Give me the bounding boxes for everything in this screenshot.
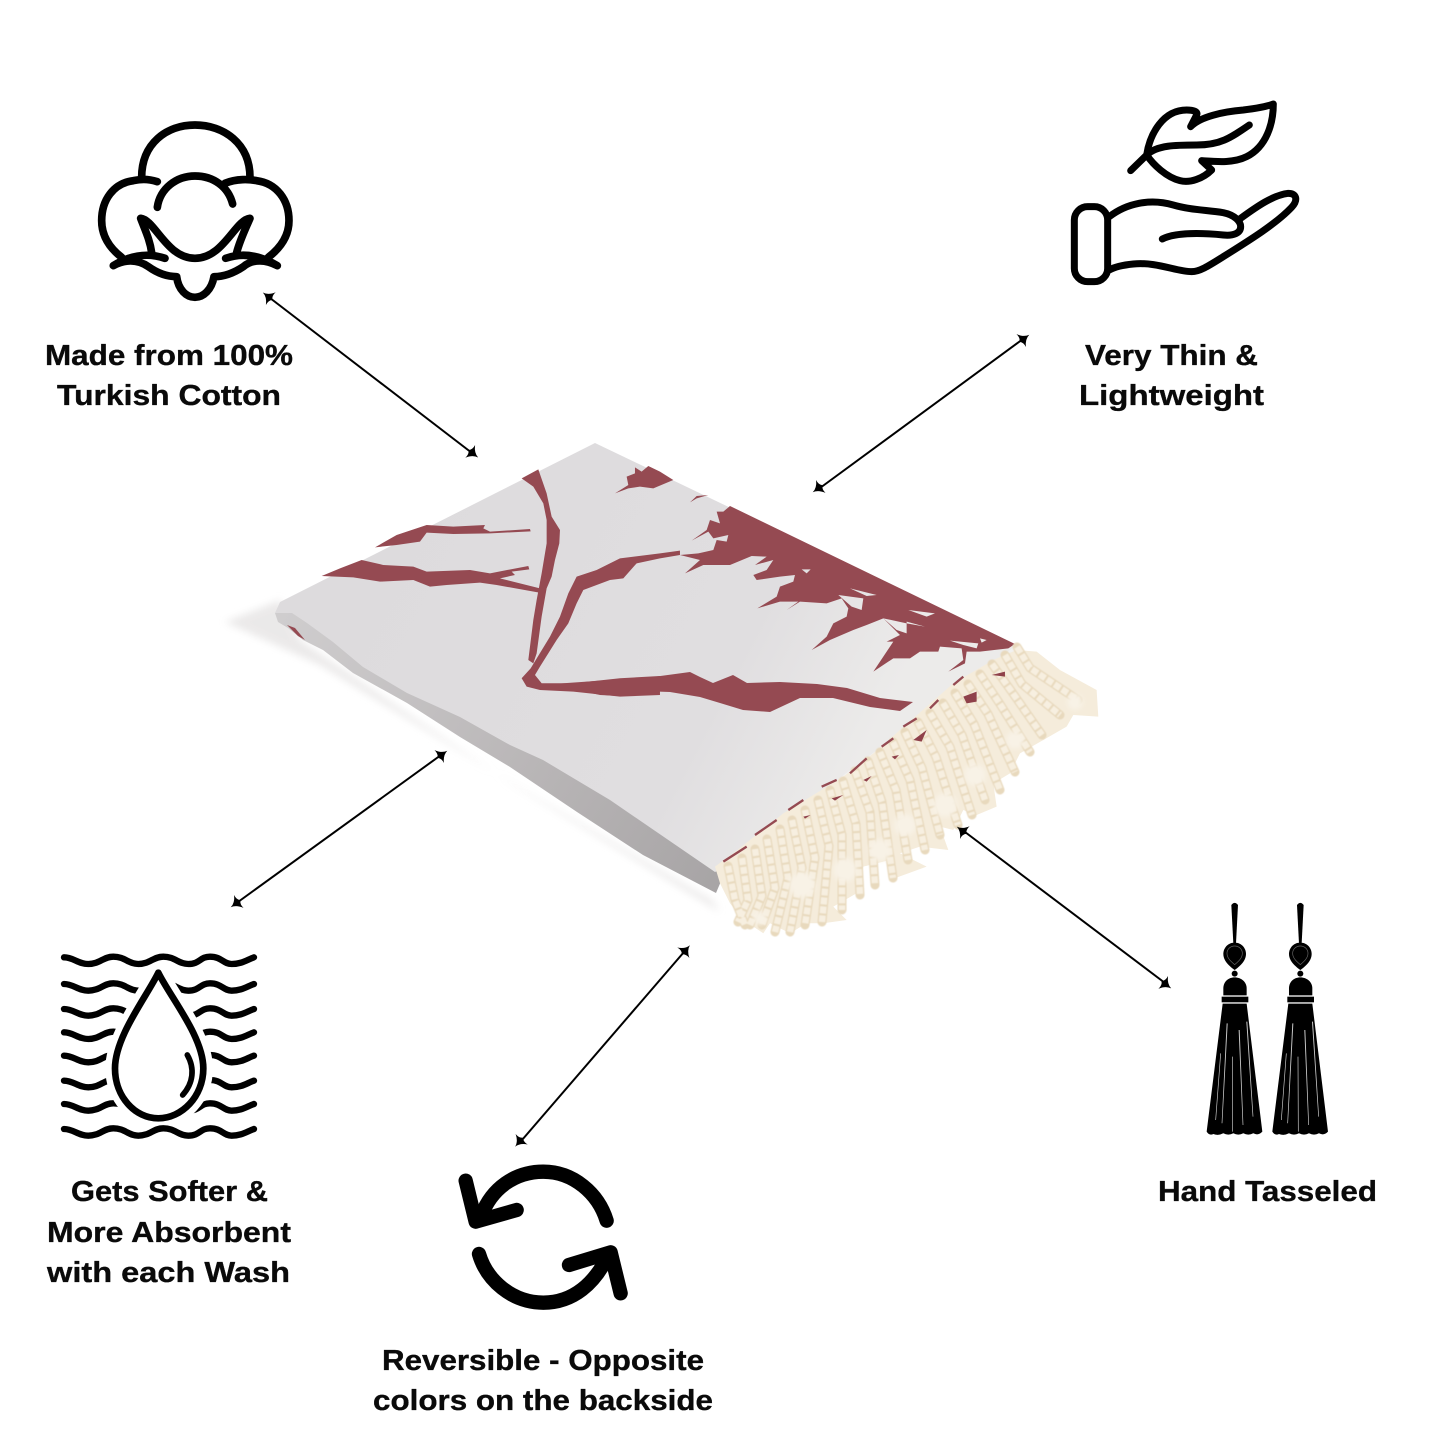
icon: water drop in waves: [64, 957, 254, 1136]
arrow: tassels: [952, 820, 1176, 995]
fringe mass: [715, 650, 1098, 933]
arrow: reversible: [509, 940, 696, 1152]
label: absorbent: More Absorbent: [47, 1217, 291, 1249]
fringe strand shadows: [728, 647, 1078, 932]
arrow: lightweight: [808, 328, 1034, 499]
label: absorbent: Gets Softer &: [71, 1176, 268, 1208]
label: lightweight: Lightweight: [1079, 380, 1264, 412]
icon: two tassels: [1207, 903, 1328, 1135]
label: cotton: Turkish Cotton: [57, 380, 281, 412]
towel photo: [225, 443, 1098, 933]
maroon tree pattern right: [680, 495, 1015, 672]
frayed tassel ends: [753, 694, 1083, 925]
arrow: absorbent: [226, 744, 452, 914]
label: cotton: [45, 340, 293, 412]
fringe strand twist: [728, 647, 1078, 932]
pale edge strip: [715, 645, 1017, 872]
towel folded side: [275, 600, 730, 893]
towel shadow: [225, 600, 720, 912]
maroon bottom branch: [543, 672, 913, 712]
label: absorbent: with each Wash: [46, 1257, 290, 1289]
arrow: cotton: [258, 286, 483, 464]
label: reversible: colors on the backside: [373, 1385, 713, 1417]
label: lightweight: [1079, 340, 1264, 412]
icon: cotton boll: [102, 125, 289, 297]
label: cotton: Made from 100%: [45, 340, 293, 372]
label: reversible: Reversible - Opposite: [382, 1345, 704, 1377]
maroon gaps between knots: [723, 672, 1005, 862]
towel top face: [275, 443, 1017, 872]
label: absorbent: [46, 1176, 291, 1289]
icon: reversible arrows: [466, 1172, 621, 1303]
fringe: [715, 645, 1098, 933]
fold pattern fragment: [287, 625, 305, 640]
icon: feather over hand: [1074, 104, 1296, 282]
maroon branches left: [322, 466, 680, 697]
label: reversible: [373, 1345, 713, 1417]
label: lightweight: Very Thin &: [1085, 340, 1258, 372]
label: tassels: Hand Tasseled: [1158, 1176, 1377, 1208]
